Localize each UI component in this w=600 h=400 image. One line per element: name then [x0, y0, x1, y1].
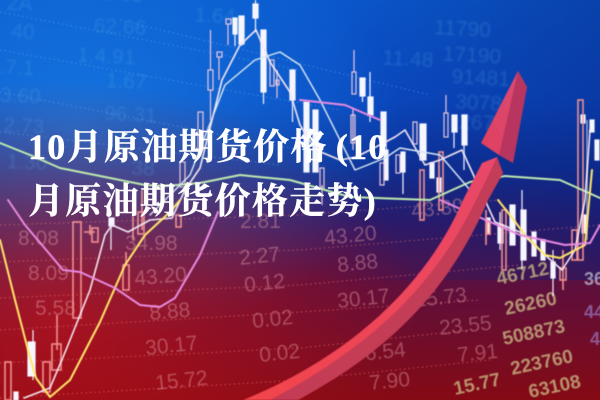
faint price numbers: red area: 30.17 — [336, 285, 391, 313]
faint price numbers: red area: 2.27 — [238, 243, 281, 270]
faint price numbers: blue area: 38 — [131, 157, 155, 181]
yellow volume numbers: 15.77 — [452, 369, 503, 400]
arrow shaft dark edge — [270, 157, 503, 400]
faint price numbers: red area: 2.81 — [240, 210, 281, 233]
pale curve — [150, 52, 470, 215]
faint price numbers: red area: 43.30 — [410, 195, 465, 223]
faint price numbers: blue area: 3.60 — [0, 84, 41, 109]
title: 10月原油期货价格(10 — [28, 127, 388, 167]
faint price numbers: red area: 6.54 — [364, 338, 407, 365]
faint price numbers: blue area: 96.31 — [104, 102, 157, 128]
arrow head dark face — [499, 71, 527, 163]
pink candles — [5, 100, 583, 400]
yellow volume numbers: 46712 — [495, 258, 551, 290]
faint price numbers: red area: 8.88 — [148, 299, 191, 325]
faint price numbers: red area: 43.20 — [133, 263, 188, 290]
faint price numbers: blue area: 40 — [11, 20, 35, 44]
title: 月原油期货价格走势) — [28, 181, 377, 221]
faint price numbers: red area: 7.90 — [368, 368, 411, 395]
faint price numbers: blue area — [0, 0, 524, 200]
rising arrow — [243, 71, 527, 400]
faint price numbers: blue area: 3078 — [455, 90, 503, 116]
faint price numbers: red area: 5.58 — [35, 297, 76, 320]
faint price numbers: red area: 0.12 — [243, 270, 286, 297]
faint price numbers: blue area: 2.73 — [3, 114, 45, 139]
faint price numbers: blue area: 62.66 — [93, 14, 147, 40]
faint price numbers: blue area: 11.48 — [382, 47, 434, 72]
pink line — [8, 100, 600, 307]
faint price numbers: blue area: 26754 — [459, 111, 518, 137]
faint price numbers: red area: 0.02 — [251, 306, 294, 333]
far right purple numbers — [584, 269, 600, 349]
arrow head — [481, 71, 527, 163]
far right purple numbers: 4 — [590, 329, 600, 349]
faint price numbers: red area: 15.73 — [413, 284, 468, 312]
arrow shaft — [243, 157, 503, 400]
faint price numbers: red area: 0.02 — [258, 340, 301, 367]
faint price numbers: blue area: 11790 — [434, 16, 491, 42]
faint price numbers: red area: 34.98 — [125, 232, 178, 255]
title — [28, 127, 388, 221]
faint price numbers: blue area: 1.67 — [105, 69, 147, 94]
yellow volume numbers — [452, 258, 583, 400]
faint price numbers: red area: 15.72 — [154, 367, 209, 395]
faint price numbers: red area: 8.08 — [18, 227, 59, 250]
faint price numbers: red area: 43.20 — [323, 222, 378, 250]
faint price numbers: red area — [18, 195, 499, 395]
yellow volume numbers: 223760 — [509, 346, 575, 380]
yellow volume numbers: 508873 — [501, 316, 567, 350]
faint price numbers: blue area: 17190 — [442, 43, 502, 69]
faint price numbers: red area: 7.91 — [456, 340, 499, 367]
green line — [0, 143, 600, 200]
faint price numbers: blue area: 1.4.91 — [77, 44, 136, 70]
faint price numbers: blue area: 91481 — [451, 65, 510, 91]
outlined pale candles — [180, 19, 448, 205]
faint price numbers: blue area: 1.64 — [194, 4, 236, 29]
faint price numbers: red area: 23.55 — [438, 312, 493, 340]
faint price numbers: red area: 30.17 — [144, 332, 199, 360]
faint price numbers: blue area: 1.30 — [6, 150, 48, 175]
faint price numbers: red area: 8.09 — [28, 262, 69, 285]
faint price numbers: red area: 8.88 — [336, 250, 379, 277]
yellow volume numbers: 26260 — [503, 288, 559, 320]
yellow line — [0, 170, 592, 397]
